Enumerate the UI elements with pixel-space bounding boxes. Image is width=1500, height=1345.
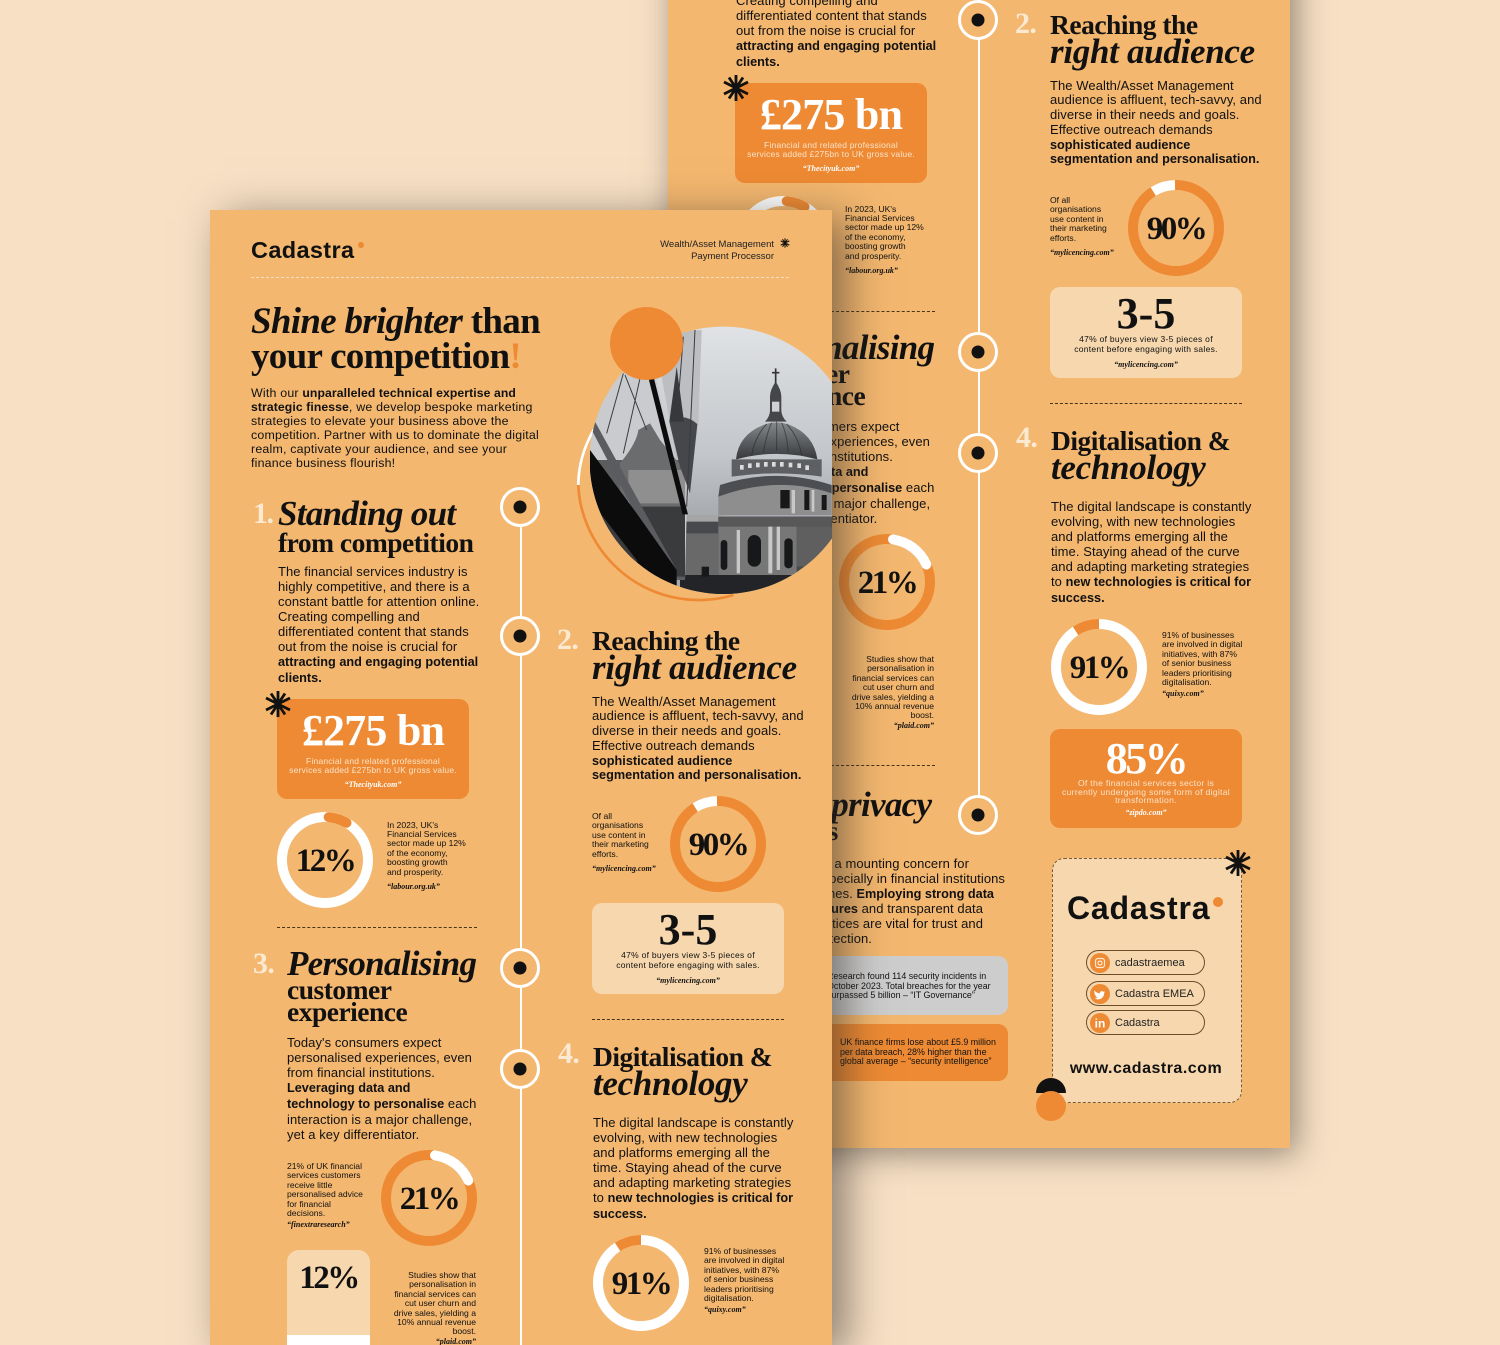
callout: 275 bn stat: £275 bn xyxy=(760,90,902,139)
text block: standing out body: The financial services industry is xyxy=(278,564,468,578)
text block: personalising body: interaction is a major challenge, xyxy=(745,496,930,510)
text block: studies note: boost. xyxy=(911,710,934,720)
text block: digitalisation body: The digital landscape is constantly xyxy=(1051,498,1251,514)
title xyxy=(251,300,540,376)
chart: donut 21 percent xyxy=(381,1150,477,1246)
text block: intro: strategic finesse, we develop bespoke marketing xyxy=(251,400,533,414)
text block: privacy body: customer protection. xyxy=(753,931,872,946)
text block: audience body: segmentation and personalisation. xyxy=(592,768,801,782)
callout: security incidents: surpassed 5 billion – “IT Governance” xyxy=(827,990,975,1000)
callout: 275 bn stat xyxy=(277,699,469,799)
text block: 12 percent note: sector made up 12% xyxy=(387,838,466,848)
chart: donut 21 percent xyxy=(839,534,935,630)
text block: standing out body: differentiated content that stands xyxy=(278,624,469,638)
text block: 91 percent note: initiatives, with 87% xyxy=(1162,649,1237,659)
social pill: linkedin: in xyxy=(1095,1016,1105,1030)
text block: 91 percent note xyxy=(1162,630,1242,687)
text block: 90 percent note xyxy=(1050,195,1107,243)
source: quixy: “quixy.com” xyxy=(704,1305,746,1314)
building body xyxy=(683,516,832,594)
text block: studies note: 10% annual revenue xyxy=(397,1317,476,1327)
heading: digitalisation and technology: Digitalisation & xyxy=(1051,425,1230,456)
text block: digitalisation body: time. Staying ahead of the curve xyxy=(593,1160,782,1174)
text block: studies note: Studies show that xyxy=(408,1270,476,1280)
text block: personalising body: technology to personalise each xyxy=(745,480,934,494)
source: plaid: “plaid.com” xyxy=(894,721,934,730)
text block: 90 percent note: use content in xyxy=(1050,214,1104,224)
chart: donut 91 percent: 91% xyxy=(612,1266,670,1302)
text block: personalising body xyxy=(745,418,934,526)
text block: 90 percent note: efforts. xyxy=(592,849,618,859)
social pill: instagram xyxy=(1086,950,1205,975)
chart: donut 12 percent xyxy=(749,196,817,262)
text block: studies note: financial services can xyxy=(852,673,934,683)
text block: audience body: audience is affluent, tech-savvy, and xyxy=(1050,92,1262,107)
icon: asterisk xyxy=(265,691,291,717)
text block: 12 percent note: and prosperity. xyxy=(387,867,443,877)
text block: digitalisation body: and adapting marketing strategies xyxy=(1051,558,1249,574)
text block: standing out body: attracting and engaging potential xyxy=(278,654,478,668)
social pill: linkedin xyxy=(1086,1010,1205,1035)
text block: audience body: The Wealth/Asset Management xyxy=(1050,78,1234,92)
header service labels: Payment Processor xyxy=(691,251,774,262)
callout: 12 percent bar: 12% xyxy=(299,1260,358,1296)
text block: intro: realm, captivate your audience, and see your xyxy=(251,442,507,456)
callout: 85 percent stat: 85% xyxy=(1106,734,1186,783)
icon: orange circle xyxy=(1036,1091,1066,1121)
text block: personalising body: personalised experiences, even xyxy=(745,434,930,448)
dome xyxy=(736,422,817,459)
icon: logo dot xyxy=(1213,897,1223,907)
reflected building in glass xyxy=(590,367,687,580)
text block: personalising body: yet a key differentiator. xyxy=(745,510,877,526)
text block: 12 percent note: boosting growth xyxy=(845,241,906,251)
text block: studies note xyxy=(394,1270,476,1336)
callout: 275 bn stat: services added £275bn to UK gross value. xyxy=(747,148,915,158)
text block: privacy body: customers, especially in financial institutions xyxy=(747,871,1005,886)
icon: asterisk xyxy=(1225,850,1251,876)
heading: data privacy xyxy=(738,785,932,846)
callout: 3-5 pieces stat: content before engaging with sales. xyxy=(1074,344,1218,354)
text block: intro xyxy=(251,386,539,470)
text block: studies note: drive sales, yielding a xyxy=(852,692,934,702)
logo: Cadastra large: Cadastra xyxy=(1067,890,1210,926)
callout: 12 percent bar xyxy=(287,1250,370,1345)
callout: 275 bn stat: £275 bn xyxy=(302,706,444,755)
text block: audience body xyxy=(1050,78,1262,166)
heading: standing out from competition: from competition xyxy=(278,527,473,558)
social pill: instagram: cadastraemea xyxy=(1115,956,1185,968)
text block: studies note: cut user churn and xyxy=(863,682,934,692)
text block: 91 percent note: leaders prioritising xyxy=(1162,668,1232,678)
callout: 275 bn stat: Financial and related professional xyxy=(306,756,440,766)
callout: 275 bn stat: Financial and related professional xyxy=(764,140,898,150)
text block: audience body: Effective outreach demands xyxy=(1050,122,1213,137)
text block: digitalisation body: time. Staying ahead of the curve xyxy=(1051,544,1240,558)
callout: data breach cost: per data breach, 28% higher than the xyxy=(840,1046,987,1056)
chart: donut 90 percent xyxy=(1128,180,1224,276)
icon: timeline node xyxy=(958,433,998,473)
text block: 91 percent note: of senior business xyxy=(1162,658,1231,668)
text block: personalising body: Today's consumers expect xyxy=(287,1034,441,1050)
text block: 90 percent note: use content in xyxy=(592,830,646,840)
text block: standing out body: differentiated content that stands xyxy=(736,8,927,22)
text block: 21 percent note: decisions. xyxy=(287,1208,325,1218)
heading: digitalisation and technology xyxy=(593,1046,772,1100)
illustration: decorative arc xyxy=(577,428,734,602)
heading: personalising customer experience: experience xyxy=(287,996,407,1026)
text block: personalising body: from financial institutions. xyxy=(745,448,893,464)
logo: Cadastra: Cadastra xyxy=(251,237,354,263)
text block: digitalisation body: The digital landscape is constantly xyxy=(593,1114,793,1130)
heading: personalising: customer xyxy=(745,358,849,388)
text block: 90 percent note: Of all xyxy=(592,811,612,821)
chart: donut 12 percent: 12% xyxy=(296,842,354,878)
title: your competition! xyxy=(251,336,521,376)
text block: privacy body xyxy=(726,856,1005,946)
chart: donut 21 percent: 21% xyxy=(857,565,916,601)
callout: 3-5 pieces stat: “mylicencing.com” xyxy=(1114,360,1178,369)
photo: St Paul's Cathedral in a circle xyxy=(590,326,832,594)
chart: donut 21 percent: 21% xyxy=(399,1181,458,1217)
text block: audience body: diverse in their needs and goals. xyxy=(592,723,781,738)
text block: audience body xyxy=(592,694,804,783)
source: labour: “labour.org.uk” xyxy=(845,266,898,275)
social pill: linkedin: Cadastra xyxy=(1115,1016,1160,1028)
text block: 90 percent note: organisations xyxy=(1050,204,1101,214)
heading: reaching the right audience: Reaching the xyxy=(592,625,740,656)
text block: 12 percent note xyxy=(387,820,466,877)
website address: www.cadastra.com xyxy=(1070,1060,1222,1077)
panel: front poster page xyxy=(210,210,832,1345)
panel: back poster page xyxy=(668,0,1290,1148)
text block: 90 percent note: their marketing xyxy=(1050,223,1107,233)
text block: standing out body: Creating compelling and xyxy=(278,608,420,624)
text block: 21 percent note: personalised advice xyxy=(287,1189,363,1199)
text block: studies note: personalisation in xyxy=(409,1279,476,1289)
text block: 90 percent note xyxy=(592,812,649,859)
text block: 12 percent note: and prosperity. xyxy=(845,251,901,261)
text block: standing out body: clients. xyxy=(278,670,322,684)
text block: intro: strategies to elevate your business above the xyxy=(251,414,509,428)
header service labels: Wealth/Asset Management xyxy=(660,239,774,250)
heading: personalising: Personalising xyxy=(745,328,934,367)
text block: audience body: segmentation and personalisation. xyxy=(1050,152,1259,166)
callout: data breach cost xyxy=(788,1024,1008,1081)
text block: standing out body: clients. xyxy=(736,54,780,68)
source: labour: “labour.org.uk” xyxy=(387,882,440,891)
chart: donut 90 percent: 90% xyxy=(689,827,747,863)
text block: 12 percent note: of the economy, xyxy=(845,232,906,242)
icon: orange circle xyxy=(610,307,683,380)
text block: 12 percent note: In 2023, UK's xyxy=(845,204,896,214)
text block: 21 percent note: 21% of UK financial xyxy=(287,1161,362,1171)
text block: personalising body: Today's consumers expect xyxy=(745,418,899,434)
chart: donut 91 percent: 91% xyxy=(1070,650,1128,686)
text block: standing out body: attracting and engaging potential xyxy=(736,38,936,52)
text block: studies note: 10% annual revenue xyxy=(855,701,934,711)
chart: donut 12 percent xyxy=(277,812,373,908)
heading: reaching the right audience: Reaching the xyxy=(1050,9,1198,40)
callout: data breach cost: UK finance firms lose about £5.9 million xyxy=(840,1037,996,1047)
callout: 3-5 pieces stat: 47% of buyers view 3-5 pieces of xyxy=(1079,334,1213,344)
text block: privacy body: due to data breaches. Employing strong data xyxy=(726,886,994,901)
callout: security incidents: October 2023. Total breaches for the year xyxy=(827,980,991,990)
text block: digitalisation body: success. xyxy=(593,1206,647,1220)
icon: black half circle xyxy=(1036,1078,1066,1093)
callout: 85 percent stat: Of the financial services sector is xyxy=(1078,778,1214,788)
chart: donut 91 percent xyxy=(591,1233,691,1333)
text block: 12 percent note: Financial Services xyxy=(845,213,915,223)
chart: donut 90 percent: 90% xyxy=(1147,211,1205,247)
social pill: twitter: Cadastra EMEA xyxy=(1115,988,1194,1000)
text block: 91 percent note: 91% of businesses xyxy=(704,1246,776,1256)
panel: contact card xyxy=(1052,858,1242,1103)
text block: personalising body: Leveraging data and xyxy=(287,1080,410,1094)
heading: digitalisation and technology: Digitalisation & xyxy=(593,1041,772,1072)
callout: 85 percent stat: currently undergoing some form of digital xyxy=(1062,787,1230,797)
section number 1: 1. xyxy=(253,497,272,530)
text block: digitalisation body: and platforms emerging all the xyxy=(1051,528,1228,544)
callout: 3-5 pieces stat: “mylicencing.com” xyxy=(656,976,720,985)
text block: 91 percent note: are involved in digital xyxy=(704,1255,784,1265)
text block: 91 percent note: of senior business xyxy=(704,1274,773,1284)
callout: 3-5 pieces stat: 3-5 xyxy=(659,905,717,954)
callout: 275 bn stat: services added £275bn to UK gross value. xyxy=(289,764,457,774)
section number 2: 2. xyxy=(1015,7,1036,40)
section number 2: 2. xyxy=(557,623,578,656)
heading: data privacy: Data privacy xyxy=(756,785,931,824)
callout: 3-5 pieces stat xyxy=(1050,287,1242,378)
text block: studies note: cut user churn and xyxy=(405,1298,476,1308)
icon: small asterisk xyxy=(780,238,790,248)
chart: donut 90 percent xyxy=(668,794,768,894)
icon: timeline node xyxy=(498,1047,542,1091)
callout: 85 percent stat xyxy=(1050,729,1242,828)
timeline line xyxy=(978,0,980,815)
text block: audience body: The Wealth/Asset Management xyxy=(592,694,776,708)
callout: security incidents: Research found 114 security incidents in xyxy=(827,971,986,981)
text block: studies note: financial services can xyxy=(394,1289,476,1299)
heading: digitalisation and technology: technology xyxy=(1051,448,1205,486)
callout: 3-5 pieces stat: 3-5 xyxy=(1117,289,1175,338)
text block: digitalisation body: to new technologies is critical for xyxy=(1051,574,1251,588)
source: finextra: “finextraresearch” xyxy=(287,1220,350,1229)
text block: 90 percent note: Of all xyxy=(1050,195,1070,205)
heading: personalising customer experience: customer xyxy=(287,974,391,1004)
text block: studies note xyxy=(852,654,934,720)
title: Shine brighter than xyxy=(251,300,540,342)
callout: data breach cost: global average – “security intelligence” xyxy=(840,1056,991,1066)
text block: 90 percent note: organisations xyxy=(592,820,643,830)
drum xyxy=(732,459,822,477)
text block: 21 percent note xyxy=(287,1161,363,1218)
text block: 12 percent note: sector made up 12% xyxy=(845,222,924,232)
text block: digitalisation body xyxy=(593,1114,793,1222)
heading: data privacy: concerns xyxy=(738,815,838,846)
heading: standing out from competition xyxy=(278,494,474,558)
text block: standing out body: out from the noise is crucial for xyxy=(278,638,457,654)
heading: personalising: experience xyxy=(745,380,865,410)
text block: studies note: drive sales, yielding a xyxy=(394,1308,476,1318)
text block: 12 percent note xyxy=(845,204,924,261)
heading: personalising customer experience: Personalising xyxy=(287,944,476,983)
text block: personalising body: interaction is a major challenge, xyxy=(287,1112,472,1126)
chart: donut 12 percent: 12% xyxy=(754,226,812,262)
text block: audience body: Effective outreach demands xyxy=(592,738,755,753)
text block: intro: competition. Partner with us to dominate the digital xyxy=(251,428,539,442)
text block: privacy body: Data security is a mounting concern for xyxy=(741,856,969,871)
text block: 91 percent note: initiatives, with 87% xyxy=(704,1265,779,1275)
text block: 12 percent note: of the economy, xyxy=(387,848,448,858)
callout: security incidents xyxy=(788,956,1008,1015)
section number 3: 3. xyxy=(253,947,274,980)
callout: 85 percent stat: “zipdo.com” xyxy=(1125,808,1167,817)
text block: digitalisation body: success. xyxy=(1051,590,1105,604)
text block: 21 percent note: for financial xyxy=(287,1199,331,1209)
text block: audience body: sophisticated audience xyxy=(592,754,732,768)
icon: asterisk xyxy=(723,75,749,101)
text block: digitalisation body: and adapting marketing strategies xyxy=(593,1174,791,1190)
text block: 90 percent note: their marketing xyxy=(592,839,649,849)
callout: 85 percent stat: transformation. xyxy=(1115,795,1177,805)
callout: 3-5 pieces stat: content before engaging with sales. xyxy=(616,960,760,970)
social pill: twitter xyxy=(1086,981,1205,1006)
section number 4: 4. xyxy=(1016,421,1037,454)
text block: intro: finance business flourish! xyxy=(251,456,395,470)
text block: 21 percent note: services customers xyxy=(287,1170,361,1180)
source: quixy: “quixy.com” xyxy=(1162,689,1204,698)
chart: donut 91 percent xyxy=(1051,619,1147,715)
section number 4: 4. xyxy=(558,1037,579,1070)
text block: 91 percent note: leaders prioritising xyxy=(704,1284,774,1294)
text block: 12 percent note: boosting growth xyxy=(387,857,448,867)
text block: digitalisation body: evolving, with new technologies xyxy=(593,1130,777,1144)
text block: standing out body xyxy=(278,564,479,684)
icon: timeline node xyxy=(500,487,540,527)
text block: personalising body: personalised experiences, even xyxy=(287,1050,472,1064)
text block: intro: With our unparalleled technical expertise and xyxy=(251,386,516,400)
text block: studies note: boost. xyxy=(453,1326,476,1336)
text block: standing out body: highly competitive, and there is a xyxy=(278,578,470,594)
callout: 3-5 pieces stat xyxy=(592,903,784,994)
text block: standing out body: constant battle for attention online. xyxy=(278,594,479,608)
text block: standing out body: out from the noise is crucial for xyxy=(736,22,915,38)
text block: privacy body: security measures and transparent data xyxy=(746,901,983,916)
text block: personalising body xyxy=(287,1034,476,1142)
callout: 275 bn stat xyxy=(735,83,927,183)
text block: 91 percent note: 91% of businesses xyxy=(1162,630,1234,640)
lantern and cross xyxy=(765,382,787,422)
heading: digitalisation and technology xyxy=(1051,425,1230,486)
text block: personalising body: Leveraging data and xyxy=(745,464,868,478)
text block: 91 percent note: digitalisation. xyxy=(1162,677,1212,687)
icon: timeline node xyxy=(958,795,998,835)
source: mylicencing: “mylicencing.com” xyxy=(592,864,656,873)
source: mylicencing: “mylicencing.com” xyxy=(1050,248,1114,257)
text block: 91 percent note: digitalisation. xyxy=(704,1293,754,1303)
icon: timeline node xyxy=(958,332,998,372)
text block: personalising body: from financial institutions. xyxy=(287,1064,435,1080)
text block: digitalisation body: to new technologies is critical for xyxy=(593,1190,793,1204)
icon: timeline node xyxy=(498,946,542,990)
text block: studies note: Studies show that xyxy=(866,654,934,664)
text block: 91 percent note xyxy=(704,1247,784,1303)
icon: logo dot xyxy=(358,242,364,248)
icon: timeline node xyxy=(500,616,540,656)
text block: 21 percent note: receive little xyxy=(287,1180,332,1190)
timeline line xyxy=(520,507,522,1345)
text block: standing out body xyxy=(736,0,936,68)
text block: audience body: audience is affluent, tech-savvy, and xyxy=(592,708,804,723)
heading: standing out from competition: Standing out xyxy=(278,494,455,533)
callout: 3-5 pieces stat: 47% of buyers view 3-5 pieces of xyxy=(621,950,755,960)
text block: 91 percent note: are involved in digital xyxy=(1162,639,1242,649)
text block: personalising body: yet a key differentiator. xyxy=(287,1126,419,1142)
icon: timeline node xyxy=(958,0,998,40)
text block: audience body: diverse in their needs and goals. xyxy=(1050,107,1239,122)
text block: digitalisation body: and platforms emerging all the xyxy=(593,1144,770,1160)
callout: 275 bn stat: “Thecityuk.com” xyxy=(345,780,401,789)
header service labels xyxy=(660,239,774,262)
text block: 12 percent note: In 2023, UK's xyxy=(387,820,438,830)
text block: studies note: personalisation in xyxy=(867,663,934,673)
text block: 12 percent note: Financial Services xyxy=(387,829,457,839)
text block: audience body: sophisticated audience xyxy=(1050,138,1190,152)
text block: 90 percent note: efforts. xyxy=(1050,233,1076,243)
heading: reaching the right audience xyxy=(592,630,797,684)
heading: reaching the right audience: right audience xyxy=(1050,32,1255,70)
text block: digitalisation body: evolving, with new technologies xyxy=(1051,514,1235,528)
heading: personalising xyxy=(745,328,934,410)
text block: digitalisation body xyxy=(1051,498,1252,604)
text block: personalising body: technology to personalise each xyxy=(287,1096,476,1110)
callout: 275 bn stat: “Thecityuk.com” xyxy=(803,164,859,173)
heading: reaching the right audience: right audience xyxy=(592,648,797,686)
heading: personalising customer experience xyxy=(287,944,476,1027)
text block: privacy body: handling practices are vital for trust and xyxy=(753,916,983,931)
heading: reaching the right audience xyxy=(1050,9,1255,70)
heading: digitalisation and technology: technology xyxy=(593,1064,747,1102)
